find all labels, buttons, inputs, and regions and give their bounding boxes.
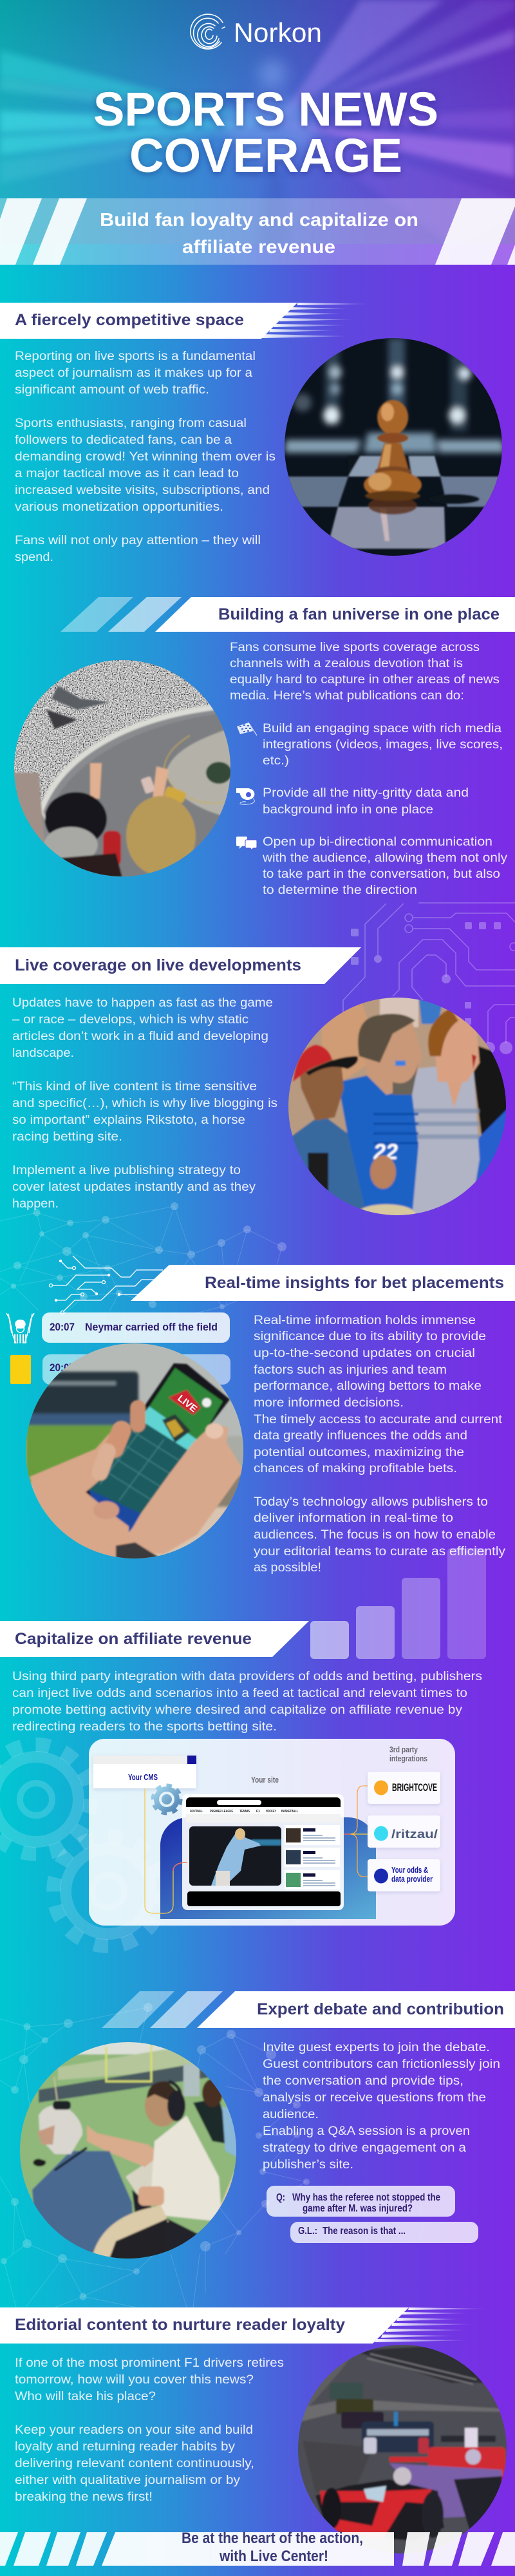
decoration: white circuit traces (49, 1256, 163, 1314)
bullet: rich media (263, 722, 503, 768)
heading: Building a fan universe in one place (218, 605, 500, 623)
decoration: ascending bars (310, 1548, 486, 1659)
intro text: media. Here’s what publications can do: (230, 689, 464, 703)
text block: publisher’s site. (263, 2158, 353, 2172)
integration: odds provider: data provider (391, 1875, 433, 1884)
hero background with light rays (0, 0, 515, 244)
text block: Enabling a Q&A session is a proven (263, 2125, 470, 2138)
event card: second (42, 1354, 230, 1385)
panel: live coverage (0, 947, 509, 1224)
text block: aspect of journalism as it makes up for a (15, 366, 252, 380)
Q&A card: question (267, 2186, 455, 2217)
text block: so important” explains Rikstoto, a horse (12, 1113, 245, 1127)
event card: 20:07: Neymar carried off the field (85, 1321, 218, 1333)
text block: significant amount of web traffic. (15, 383, 209, 397)
text block: Reporting on live sports is a fundamental (15, 350, 256, 363)
decoration: network lines lower (0, 2003, 310, 2307)
heading: Expert debate and contribution (257, 2000, 504, 2018)
panel: expert debate (18, 1991, 515, 2267)
bullet: data: background info in one place (263, 803, 433, 817)
text block: – or race – develops, which is why static (12, 1013, 248, 1027)
text block: redirecting readers to the sports betting site. (12, 1720, 277, 1734)
text block: demanding crowd! Yet winning them over is (15, 450, 276, 464)
bullet: communication: to take part in the conversation, but also (263, 867, 500, 881)
icon: whistle (236, 788, 254, 804)
decorative parallelograms (61, 597, 182, 632)
chair (90, 2206, 169, 2267)
integration: Brightcove: BRIGHTCOVE (392, 1781, 437, 1794)
phone (85, 1362, 230, 1497)
heading: Editorial content to nurture reader loyalty (15, 2316, 345, 2334)
hero photo in mockup (189, 1826, 281, 1886)
heading: Live coverage on live developments (15, 956, 301, 974)
text block (12, 996, 277, 1211)
speed lines (375, 2307, 491, 2342)
panel: capitalize on affiliate revenue (0, 1621, 482, 1926)
bullet: data: Provide all the nitty-gritty data and (263, 786, 469, 800)
icon: referee (6, 1313, 34, 1343)
text block: various monetization opportunities. (15, 500, 223, 514)
text block: loyalty and returning reader habits by (15, 2440, 236, 2454)
text block: Guest contributors can frictionlessly join (263, 2058, 500, 2071)
heading banner (0, 1621, 309, 1657)
text block: and specific(…), which is why live blogging is (12, 1097, 277, 1110)
red and purple cars (428, 2447, 505, 2483)
text block: spend. (15, 551, 53, 564)
text block: followers to dedicated fans, can be a (15, 433, 232, 447)
icon: checkered flag (237, 723, 257, 735)
text block: chances of making profitable bets. (254, 1462, 457, 1475)
intro text: Fans consume live sports coverage across (230, 641, 480, 654)
diagram: CMS to site integrations (89, 1739, 455, 1926)
text block: Fans will not only pay attention – they will (15, 534, 261, 547)
intro text (230, 641, 500, 703)
text block: strategy to drive engagement on a (263, 2141, 466, 2155)
photo: hands holding betting phone (24, 1342, 251, 1565)
text block: more informed decisions. (254, 1396, 404, 1410)
label: 3rd party integrations: integrations (389, 1754, 427, 1763)
CMS box: Your CMS (128, 1772, 158, 1782)
photo: cheering sports fans (286, 995, 509, 1224)
integration: odds provider (368, 1859, 440, 1891)
photo: chess pawn (283, 335, 505, 557)
text block: Implement a live publishing strategy to (12, 1164, 241, 1177)
heading: A fiercely competitive space (15, 311, 244, 329)
heading banner (197, 1991, 515, 2028)
hands (118, 1423, 243, 1554)
text block: Real-time information holds immense (254, 1314, 476, 1327)
bullet: communication: Open up bi-directional communication (263, 835, 492, 849)
site mockup: FOOTBALL (190, 1810, 203, 1814)
LIVE badge label: LIVE (176, 1393, 199, 1415)
arch backdrop (160, 1817, 376, 1919)
text block: Today’s technology allows publishers to (254, 1495, 488, 1509)
event card: second: 20:07 (50, 1361, 75, 1374)
icon: yellow card (10, 1355, 31, 1384)
text block: audience. (263, 2108, 319, 2121)
text block: potential outcomes, maximizing the (254, 1446, 464, 1459)
integration: Ritzau: /ritzau/ (391, 1828, 438, 1841)
site mockup: TENNIS (239, 1810, 250, 1814)
text block: If one of the most prominent F1 drivers retires (15, 2356, 284, 2370)
text block: performance, allowing bettors to make (254, 1379, 482, 1393)
bullet: rich media: Build an engaging space with rich media (263, 722, 501, 735)
subtitle text (100, 210, 418, 258)
intro text: channels with a zealous devotion that is (230, 657, 463, 670)
text block: Invite guest experts to join the debate. (263, 2041, 490, 2054)
Q&A card: answer: G.L.: (298, 2226, 317, 2237)
decoration: large gears (0, 1745, 163, 1946)
fans (90, 763, 102, 799)
event card: 20:07 (42, 1312, 230, 1343)
panel: building a fan universe (13, 597, 515, 897)
subtitle text: affiliate revenue (182, 237, 335, 258)
Q&A card: question: Why has the referee not stopped the (292, 2192, 440, 2203)
panel: a fiercely competitive space (0, 303, 505, 564)
intro text: equally hard to capture in other areas of news (230, 673, 500, 687)
text block: Using third party integration with data providers of odds and betting, publishers (12, 1670, 482, 1683)
footer text (182, 2530, 363, 2565)
far cars (330, 2383, 363, 2400)
text block: can inject live odds and scenarios into a feed at tactical and relevant times to (12, 1687, 467, 1700)
text block: happen. (12, 1197, 59, 1211)
text block: a major tactical move as it can lead to (15, 467, 239, 480)
heading banner (0, 303, 297, 339)
heading banner (131, 1265, 515, 1301)
text block: Sports enthusiasts, ranging from casual (15, 417, 247, 430)
site mockup: PREMIER LEAGUE (210, 1810, 234, 1814)
text block: landscape. (12, 1046, 74, 1060)
brand name: Norkon (234, 17, 322, 48)
text block: The timely access to accurate and current (254, 1413, 503, 1426)
photo: commentators in press box (18, 2040, 240, 2267)
panel: editorial content (0, 2307, 509, 2557)
icon: gear (153, 1786, 180, 1813)
text block: as possible! (254, 1561, 321, 1575)
text block: tomorrow, how will you cover this news? (15, 2373, 254, 2387)
Q&A card: question: Q: (276, 2192, 285, 2203)
text block: factors such as injuries and team (254, 1363, 447, 1377)
text block: significance due to its ability to provide (254, 1330, 486, 1343)
footer text: Be at the heart of the action, (182, 2530, 363, 2547)
title: SPORTS NEWS (93, 82, 438, 136)
center man (87, 2125, 161, 2167)
integration: Ritzau (368, 1815, 440, 1848)
left man (292, 1117, 365, 1209)
panel: real-time insights (6, 1265, 515, 1575)
photo: Formula E race cars (296, 2344, 509, 2557)
label: 3rd party integrations: 3rd party (389, 1745, 418, 1754)
decoration: network lines mid (0, 1202, 286, 1314)
decoration: circuit lines top right (343, 903, 515, 1054)
left man (32, 2151, 135, 2267)
Q&A card: answer (290, 2222, 478, 2243)
text block: cover latest updates instantly and as they (12, 1180, 256, 1194)
text block: Keep your readers on your site and build (15, 2423, 253, 2437)
text block: articles don’t work in a fluid and developing (12, 1030, 268, 1043)
bullet: communication: with the audience, allowing them not only (262, 851, 508, 865)
icon: chat bubbles (236, 837, 257, 850)
site mockup (182, 1794, 344, 1910)
icon: Norkon spiral mark (191, 14, 225, 49)
logo (191, 14, 322, 49)
heading banner (0, 947, 361, 984)
connectors (145, 1786, 368, 1913)
heading: Real-time insights for bet placements (205, 1274, 504, 1292)
title: COVERAGE (129, 129, 402, 182)
Q&A card: answer: The reason is that ... (323, 2226, 406, 2237)
decorative parallelograms (102, 1991, 223, 2028)
site mockup: BASKETBALL (281, 1810, 298, 1814)
bullet: communication (262, 835, 508, 897)
speed lines (262, 303, 371, 338)
bullet: rich media: etc.) (263, 754, 289, 768)
heading banner (155, 597, 515, 632)
event card: 20:07: 20:07 (50, 1321, 75, 1333)
footer call-to-action band (0, 2530, 515, 2566)
text block: increased website visits, subscriptions, and (15, 484, 270, 497)
text block: promote betting activity where desired and capitalize on affiliate revenue by (12, 1703, 463, 1717)
bullet: communication: to determine the direction (263, 884, 417, 897)
text block: deliver information in real-time to (254, 1511, 453, 1525)
text block (254, 1314, 506, 1575)
text block (15, 350, 276, 564)
label: your site: Your site (251, 1775, 279, 1785)
bullet: data (263, 786, 469, 817)
text block (15, 2356, 284, 2504)
text block: either with qualitative journalism or by (15, 2474, 241, 2487)
text block: up-to-the-second updates on crucial (254, 1347, 475, 1360)
photo: cheering sports fans: 22 (372, 1140, 400, 1164)
site mockup: F1 (256, 1810, 260, 1814)
text block: breaking the news first! (15, 2490, 153, 2504)
text block: “This kind of live content is time sensitive (12, 1080, 257, 1094)
Q&A card: question: game after M. was injured? (303, 2203, 413, 2214)
article rows (285, 1825, 340, 1889)
text block: audiences. The focus is on how to enable (254, 1528, 496, 1542)
photo: race fans at speedway (13, 657, 235, 889)
heading: Capitalize on affiliate revenue (15, 1630, 252, 1648)
text block: racing betting site. (12, 1130, 122, 1144)
bullet: rich media: integrations (videos, images, live scores, (263, 738, 503, 752)
integration: odds provider: Your odds & (391, 1866, 428, 1875)
text block: Updates have to happen as fast as the game (12, 996, 273, 1010)
subtitle band (0, 198, 515, 265)
text block: your editorial teams to curate as efficiently (254, 1545, 506, 1558)
footer text: with Live Center! (219, 2548, 328, 2565)
right man (411, 1065, 482, 1214)
heading banner (0, 2307, 409, 2344)
text block: the conversation and provide tips, (263, 2074, 464, 2088)
text block (12, 1670, 482, 1734)
site mockup: HOCKEY (266, 1810, 276, 1814)
label: 3rd party integrations (389, 1745, 427, 1763)
integration: Brightcove (368, 1772, 440, 1804)
CMS box (93, 1756, 196, 1788)
text block: data greatly influences the odds and (254, 1429, 467, 1443)
pawn (377, 400, 408, 435)
middle man (338, 1075, 418, 1217)
text block: delivering relevant content continuously, (15, 2457, 254, 2470)
text block: analysis or receive questions from the (263, 2091, 486, 2105)
text block (263, 2041, 500, 2172)
title (93, 82, 438, 182)
text block: Who will take his place? (15, 2390, 156, 2403)
subtitle text: Build fan loyalty and capitalize on (100, 210, 418, 231)
